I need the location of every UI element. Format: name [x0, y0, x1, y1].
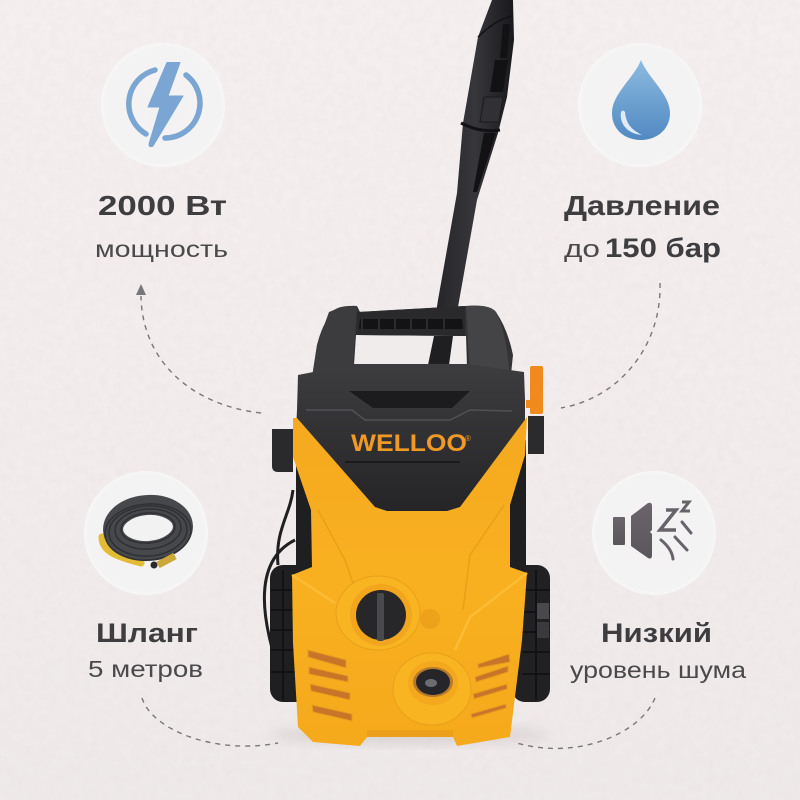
brand logo: ®: [465, 434, 471, 443]
heading: up to 150 bar: [564, 233, 721, 263]
text: noise level: уровень шума: [570, 657, 746, 683]
knob: [336, 576, 440, 650]
heading: low: Низкий: [601, 618, 712, 648]
arrow: hose to washer: [142, 698, 278, 746]
orange lever: [526, 366, 544, 454]
right wheel: [512, 565, 550, 702]
pressure washer: [264, 0, 550, 746]
text: 5 meters: 5 метров: [88, 656, 203, 682]
arrow: noise to washer: [517, 698, 655, 748]
heading: pressure: Давление: [564, 190, 720, 221]
feature: low noise: [570, 471, 746, 683]
arrow: power to washer: [136, 284, 261, 413]
feature: power: [95, 43, 228, 262]
left clip: [272, 429, 293, 472]
icon: lightning bolt in circle: [101, 43, 225, 167]
left wheel: [270, 565, 310, 702]
heading: up to 150 bar: до: [564, 236, 600, 263]
heading: up to 150 bar: 150 бар: [605, 233, 721, 263]
top dark body: [296, 364, 525, 511]
brand logo: WELLOO: [351, 430, 467, 457]
spray wand: [428, 0, 514, 365]
heading: hose: Шланг: [96, 618, 198, 648]
power cord: [264, 490, 296, 685]
feature: hose: [84, 471, 208, 682]
nozzle: [393, 653, 471, 725]
rear dark frame: [296, 440, 526, 572]
floor shadow: [270, 726, 550, 744]
text: power label: мощность: [95, 236, 228, 262]
vents: [308, 650, 510, 721]
feature: pressure: [564, 43, 721, 263]
icon: water drop in circle: [578, 43, 702, 167]
heading: 2000 W: 2000 Вт: [98, 190, 227, 221]
icon: speaker with zzz in circle: [592, 471, 716, 595]
icon: coiled hose in circle: [84, 471, 208, 595]
arrow: pressure to washer: [561, 283, 660, 408]
handle: [311, 306, 513, 384]
yellow shell: [292, 417, 527, 746]
